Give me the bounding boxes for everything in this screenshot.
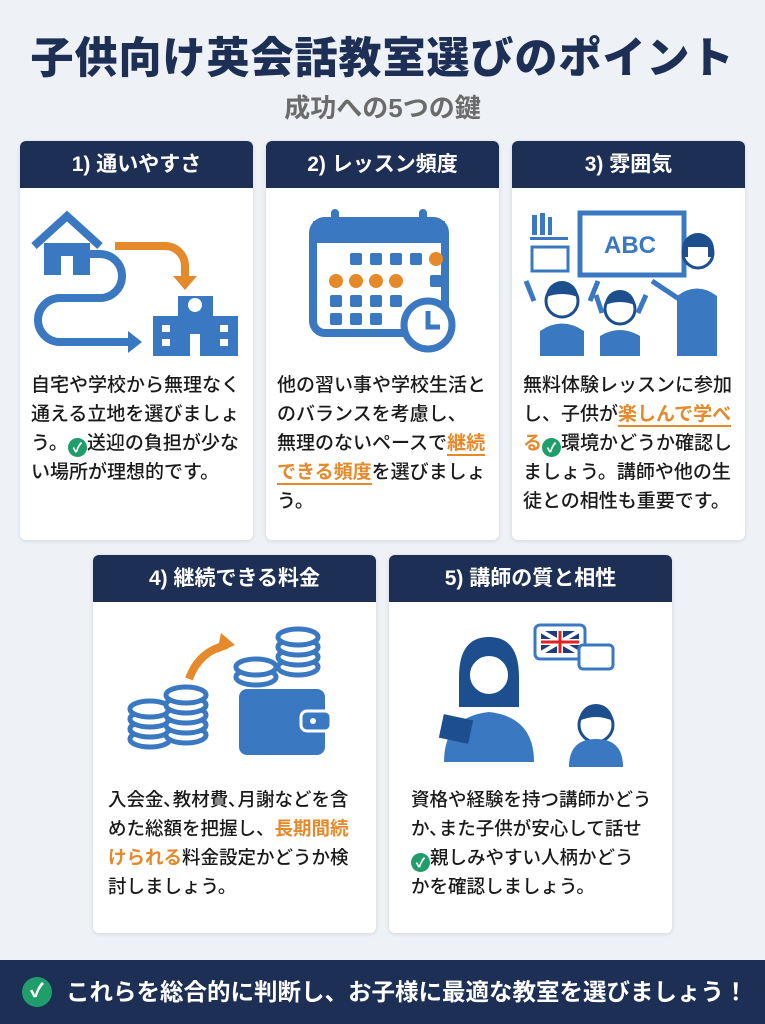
text 4: けられる料金設定かどうか検	[108, 847, 349, 868]
icon: home to school route	[31, 210, 238, 356]
text 1: ✓	[73, 440, 82, 455]
text 1: い場所が理想的です。	[31, 462, 219, 483]
heading 1	[20, 141, 253, 188]
footer banner: これらを総合的に判断し、お子様に最適な教室を選びましょう！	[66, 979, 748, 1005]
text 5: ✓	[416, 855, 425, 870]
text 2: 他の習い事や学校生活と	[277, 375, 486, 396]
text 5: 資格や経験を持つ講師かどう	[411, 789, 652, 810]
icon: check	[22, 977, 52, 1007]
panel: 2 frequency	[266, 141, 499, 540]
text 4: 入会金､教材費､月謝などを含	[108, 789, 349, 810]
text 2: 無理のないペースで継続	[277, 433, 485, 454]
icon: coins and wallet	[128, 626, 330, 755]
heading 3	[512, 141, 745, 188]
text 2: う。	[277, 491, 314, 512]
text 4	[108, 789, 349, 897]
text 3: ましょう。講師や他の生	[523, 462, 731, 483]
heading 5: 5) 講師の質と相性	[445, 567, 616, 590]
text 3: 徒との相性も重要です。	[523, 491, 730, 512]
text 1: 自宅や学校から無理なく	[31, 375, 240, 396]
text 1	[31, 374, 240, 483]
text 1: う。 送迎の負担が少な	[31, 433, 239, 454]
text 1: 通える立地を選びましょ	[31, 404, 239, 425]
text 5: かを確認しましょう。	[411, 876, 595, 897]
subtitle: 成功への5つの鍵	[284, 93, 481, 123]
footer banner	[0, 960, 765, 1024]
text 3	[523, 374, 732, 512]
heading 4: 4) 継続できる料金	[149, 567, 320, 590]
heading 5	[389, 555, 672, 602]
icon: classroom	[524, 210, 717, 356]
text 2	[277, 374, 486, 512]
text 3: る 環境かどうか確認し	[523, 433, 732, 454]
text 5: か､また子供が安心して話せ	[411, 818, 642, 839]
heading 3: 3) 雰囲気	[585, 153, 672, 176]
text 3: し、子供が楽しんで学べ	[523, 404, 731, 425]
title: 子供向け英会話教室選びのポイント	[30, 35, 734, 83]
text 4: 討しましょう。	[108, 876, 236, 897]
heading 1: 1) 通いやすさ	[72, 153, 201, 176]
heading 4	[93, 555, 376, 602]
icon: classroom: ABC	[604, 232, 656, 259]
heading 2	[266, 141, 499, 188]
heading 2: 2) レッスン頻度	[307, 153, 458, 176]
panel: 3 atmosphere	[512, 141, 745, 540]
panel: 5 teacher	[389, 555, 672, 933]
icon: calendar with clock	[309, 209, 456, 352]
text 3: ✓	[547, 440, 556, 455]
text 5	[411, 789, 652, 897]
text 3: 無料体験レッスンに参加	[523, 375, 732, 396]
text 5: 親しみやすい人柄かどう	[430, 847, 634, 868]
icon: teacher and child	[438, 624, 623, 767]
text 2: できる頻度を選びましょ	[277, 462, 486, 483]
icon: check: ✓	[30, 981, 44, 1002]
text 2: のバランスを考慮し、	[277, 404, 467, 425]
text 4: めた総額を把握し、長期間続	[108, 818, 349, 839]
panel: 1 accessibility	[20, 141, 253, 540]
panel: 4 fees	[93, 555, 376, 933]
